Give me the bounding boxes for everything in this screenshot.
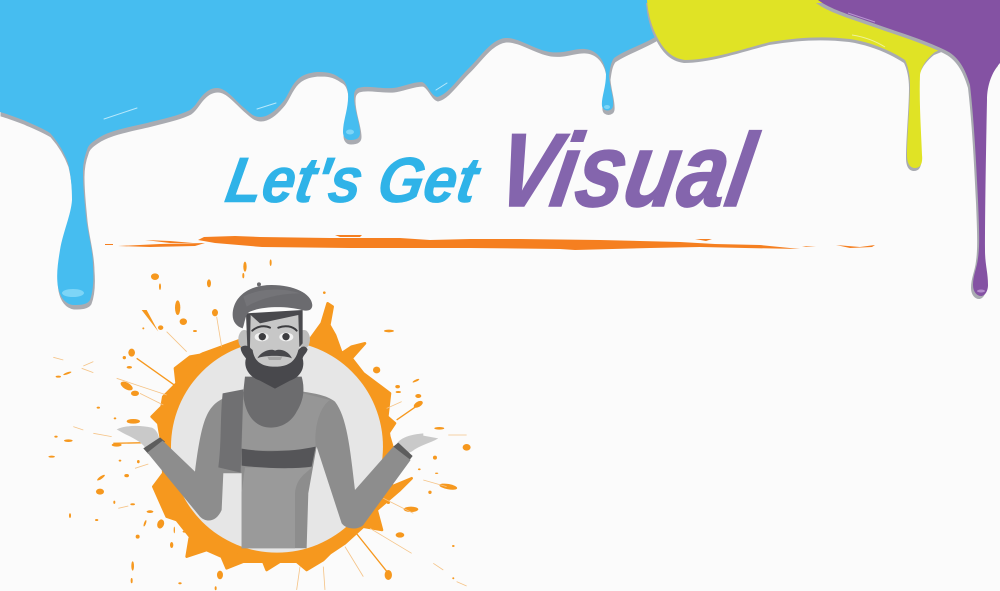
orange paint splatter: [48, 259, 471, 590]
cuffs: [143, 437, 165, 454]
yellow paint drips: [646, 0, 945, 171]
eyes: [252, 326, 297, 341]
heading: Let's Get: Let's Get: [221, 144, 486, 216]
beret: [233, 285, 312, 328]
scarf around neck: [243, 377, 303, 428]
sweater and arms: [147, 392, 411, 548]
mustache and mouth: [257, 350, 292, 358]
blue paint drips: [0, 0, 666, 309]
sweater chest: [242, 393, 330, 450]
beard: [241, 346, 308, 389]
man figure: [117, 282, 438, 548]
orange brush stroke divider: [105, 235, 875, 250]
face: [250, 315, 299, 367]
hair: [246, 310, 303, 350]
hands: [117, 426, 160, 450]
character illustration with paint splatter: [48, 259, 471, 590]
splatter ring: [152, 303, 412, 570]
heading: Visual: Visual: [489, 113, 765, 229]
grey circle: [171, 341, 383, 553]
scarf hanging end: [218, 389, 243, 473]
ears: [238, 330, 250, 349]
purple paint drips: [816, 0, 1000, 299]
title: [221, 113, 765, 229]
belt stripe: [242, 447, 316, 468]
